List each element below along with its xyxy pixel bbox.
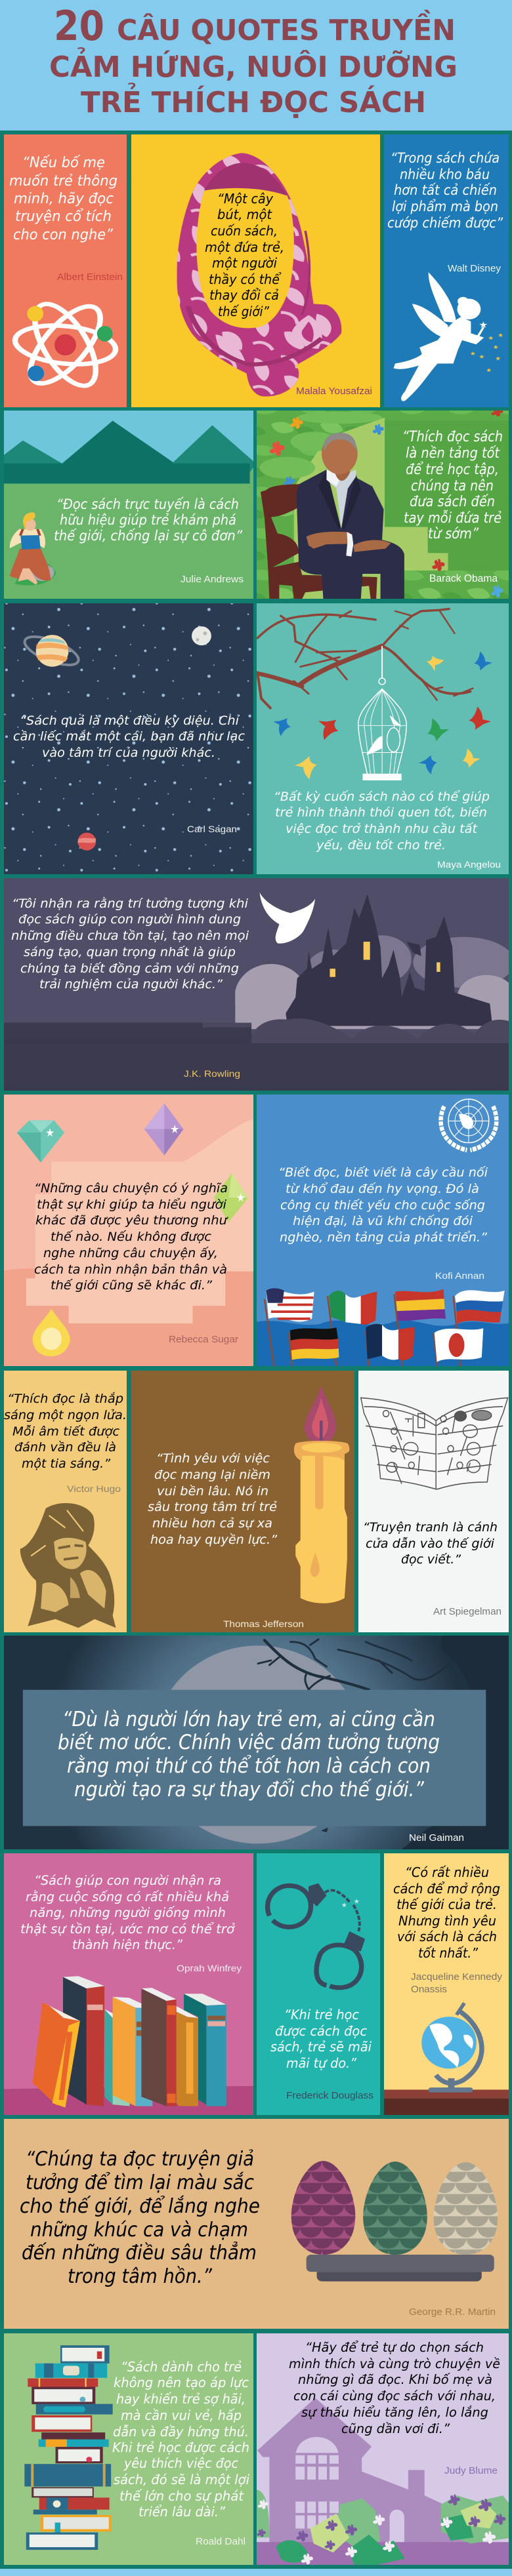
quote: “Truyện tranh là cánh bbox=[363, 1520, 498, 1535]
footer band bbox=[0, 2569, 512, 2576]
quote: người tạo ra sự thay đổi cho thế giới.” bbox=[74, 1778, 425, 1801]
quote: chúng ta biết đồng cảm với những bbox=[20, 961, 239, 976]
author: Julie Andrews bbox=[181, 574, 244, 585]
quote bbox=[363, 1520, 498, 1567]
author: Onassis bbox=[411, 1984, 447, 1995]
author: Victor Hugo bbox=[67, 1483, 121, 1494]
quote: đánh vần đều là bbox=[14, 1440, 116, 1455]
quote: mà cần vui vẻ, hấp bbox=[121, 2407, 242, 2423]
quote: nghèo, nền tảng của phát triển.” bbox=[280, 1230, 487, 1245]
author: Roald Dahl bbox=[196, 2537, 245, 2547]
panel: Barack Obama bbox=[257, 411, 509, 599]
quote: đọc mang lại niềm bbox=[154, 1468, 270, 1482]
quote: rằng cuộc sống có rất nhiều khả bbox=[26, 1889, 229, 1904]
quote: cho con nghe” bbox=[13, 227, 114, 243]
quote: năng, những người giống mình bbox=[30, 1905, 226, 1920]
quote: “Tôi nhận ra rằng trí tưởng tượng khi bbox=[12, 896, 248, 911]
quote: “Thích đọc sách bbox=[402, 429, 503, 445]
author: Carl Sagan bbox=[187, 824, 237, 834]
quote: không nên tạo áp lực bbox=[114, 2375, 249, 2390]
quote: rằng mọi thứ có thể tốt hơn là cách con bbox=[67, 1754, 431, 1778]
author: Jacqueline Kennedy bbox=[411, 1972, 503, 1982]
quote: thế giới cũng sẽ khác đi.” bbox=[51, 1278, 212, 1293]
quote: tốt nhất.” bbox=[418, 1945, 479, 1961]
quote: để trẻ học tập, bbox=[406, 462, 499, 478]
quote: “Một cây bbox=[217, 191, 274, 207]
author: Walt Disney bbox=[448, 263, 501, 274]
quote: với sách là cách bbox=[397, 1929, 497, 1944]
quote: bút, một bbox=[217, 207, 272, 222]
illustration: tree branch bbox=[257, 609, 473, 708]
panel: J.K. Rowling bbox=[4, 878, 509, 1091]
quote: nhiều kho báu bbox=[400, 167, 490, 182]
quote: mãi tự do.” bbox=[286, 2055, 357, 2071]
quote: công cụ thiết yếu cho cuộc sống bbox=[280, 1198, 485, 1213]
author: Art Spiegelman bbox=[433, 1607, 501, 1617]
quote: “Sách giúp con người nhận ra bbox=[34, 1873, 221, 1888]
quote: Khi trẻ học được cách bbox=[112, 2440, 249, 2455]
author: J.K. Rowling bbox=[184, 1068, 240, 1079]
quote: thế giới, chống lại sự cô đơn” bbox=[54, 528, 242, 544]
quote: cho thế giới, để lắng nghe bbox=[20, 2194, 260, 2218]
author: Judy Blume bbox=[444, 2466, 498, 2476]
illustration: comic book bbox=[361, 1398, 508, 1489]
quote: thầy có thể bbox=[209, 272, 282, 287]
panel: Thomas Jefferson bbox=[131, 1371, 354, 1632]
quote bbox=[9, 155, 117, 243]
quote bbox=[387, 150, 503, 231]
quote: sự thấu hiểu tăng lên, lo lắng bbox=[301, 2405, 488, 2420]
illustration: row of books bbox=[0, 1976, 255, 2122]
illustration: background and gems bbox=[0, 1103, 255, 1370]
quote: nghe những câu chuyện ấy, bbox=[43, 1246, 218, 1260]
author: George R.R. Martin bbox=[409, 2306, 496, 2318]
illustration: bird cage bbox=[358, 646, 406, 780]
quote bbox=[274, 790, 490, 853]
quote: cửa dẫn vào thế giới bbox=[366, 1537, 494, 1551]
quote: thế giới” bbox=[218, 304, 269, 319]
icons: birds bbox=[271, 650, 493, 782]
quote: từ khổ đau đến hy vọng. Đó là bbox=[286, 1182, 479, 1196]
panel: Oprah Winfrey bbox=[4, 1853, 253, 2115]
quote: tưởng để tìm lại màu sắc bbox=[26, 2171, 254, 2194]
quote: trẻ hình thành thói quen tốt, biến bbox=[275, 805, 487, 820]
header banner bbox=[0, 0, 512, 131]
illustration: garden background bbox=[257, 407, 512, 602]
quote bbox=[112, 2359, 249, 2520]
panel: Victor Hugo bbox=[4, 1371, 127, 1632]
panel: Carl Sagan bbox=[4, 603, 253, 874]
text backdrop bbox=[23, 1690, 486, 1826]
quote: Mỗi âm tiết được bbox=[12, 1424, 120, 1439]
quote: muốn trẻ thông bbox=[9, 173, 117, 190]
quote: trải nghiệm của người khác.” bbox=[39, 977, 223, 992]
quote: vui bền lâu. Nó in bbox=[157, 1484, 268, 1499]
quote bbox=[13, 714, 245, 760]
panel: Neil Gaiman bbox=[4, 1636, 509, 1849]
quote bbox=[289, 2340, 500, 2436]
quote: yếu, đều tốt cho trẻ. bbox=[316, 838, 446, 853]
quote: đọc viết.” bbox=[401, 1552, 461, 1567]
quote: hữu hiệu giúp trẻ khám phá bbox=[60, 512, 236, 528]
panel: Art Spiegelman bbox=[358, 1371, 509, 1632]
quote: “Sách quả là một điều kỳ diệu. Chỉ bbox=[20, 714, 240, 728]
quote: “Bất kỳ cuốn sách nào có thể giúp bbox=[274, 790, 490, 804]
quote: dẫn và đầy hứng thú. bbox=[113, 2424, 249, 2440]
illustration: seated man bbox=[261, 433, 404, 599]
icon: fairy silhouette bbox=[393, 272, 503, 401]
icon: atom bbox=[12, 298, 119, 392]
quote: những khúc ca và chạm bbox=[30, 2219, 248, 2242]
quote: cách ta nhìn nhận bản thân và bbox=[34, 1262, 227, 1277]
quote: thế giới của trẻ. bbox=[396, 1897, 497, 1912]
quote bbox=[148, 1451, 278, 1547]
quote: Nhưng tình yêu bbox=[398, 1913, 496, 1929]
quote: sách, trẻ sẽ mãi bbox=[270, 2039, 372, 2055]
icon: headscarf bbox=[177, 153, 341, 397]
quote: sáng một ngọn lửa. bbox=[4, 1408, 127, 1422]
quote: “Có rất nhiều bbox=[405, 1864, 489, 1880]
quote: một đứa trẻ, bbox=[205, 239, 284, 255]
quote: hay khiến trẻ sợ hãi, bbox=[116, 2391, 245, 2407]
quote bbox=[393, 1864, 500, 1961]
quote: mình thích và cùng trò chuyện về bbox=[289, 2356, 500, 2371]
quote: cuốn sách, bbox=[211, 223, 278, 239]
illustration: house and flowers bbox=[255, 2398, 512, 2567]
quote: những điều chưa tồn tại, tạo nên mọi bbox=[11, 929, 249, 943]
icon: girl reading bbox=[10, 512, 56, 586]
quote bbox=[20, 2148, 260, 2288]
author: Oprah Winfrey bbox=[177, 1963, 242, 1973]
quote: chúng ta nên bbox=[411, 478, 494, 494]
quote: hiện đại, là vũ khí chống đói bbox=[293, 1214, 473, 1228]
quote: thế nào. Nếu không được bbox=[51, 1230, 212, 1244]
illustration: candle bbox=[294, 1386, 349, 1603]
panel: Judy Blume bbox=[257, 2333, 509, 2565]
quote: “Thích đọc là thắp bbox=[7, 1391, 123, 1406]
author: Thomas Jefferson bbox=[223, 1619, 304, 1629]
title: CẢM HỨNG, NUÔI DƯỠNG bbox=[49, 47, 458, 84]
quote: khác đã được yêu thương như bbox=[35, 1213, 228, 1228]
quote bbox=[58, 1708, 440, 1801]
illustration: globe on desk bbox=[382, 2003, 512, 2123]
quote: “Đọc sách trực tuyến là cách bbox=[56, 496, 239, 512]
quote: trong tâm hồn.” bbox=[68, 2265, 213, 2288]
quote: “Hãy để trẻ tự do chọn sách bbox=[305, 2340, 484, 2355]
quote: hơn tất cả chiến bbox=[394, 182, 497, 198]
quote: truyện cổ tích bbox=[15, 209, 112, 225]
quote: triển lâu dài.” bbox=[139, 2504, 226, 2520]
author: Albert Einstein bbox=[57, 272, 123, 283]
quote: là nền tảng tốt bbox=[406, 445, 500, 462]
panel: Malala Yousafzai bbox=[131, 134, 380, 407]
icon: broken handcuffs bbox=[268, 1883, 365, 1988]
quote: sáng tạo, quan trọng nhất là giúp bbox=[24, 945, 236, 959]
quote: “Nếu bố mẹ bbox=[22, 155, 105, 171]
title: TRẺ THÍCH ĐỌC SÁCH bbox=[81, 82, 426, 119]
illustration: mountains bbox=[0, 409, 258, 483]
illustration: flags bbox=[255, 1288, 512, 1370]
author bbox=[411, 1972, 503, 1995]
quote bbox=[278, 1165, 488, 1245]
quote: “Chúng ta đọc truyện giả bbox=[26, 2148, 254, 2171]
quote: một tia sáng.” bbox=[22, 1457, 110, 1471]
quote: “Sách dành cho trẻ bbox=[121, 2359, 242, 2375]
quote: nhiều hơn cả sự xa bbox=[152, 1516, 272, 1531]
quote: “Tình yêu với việc bbox=[156, 1451, 270, 1466]
panel: Kofi Annan bbox=[257, 1095, 509, 1366]
panel: George R.R. Martin bbox=[4, 2119, 509, 2329]
panel: Albert Einstein bbox=[4, 134, 127, 407]
quote bbox=[34, 1181, 228, 1293]
quote bbox=[20, 1873, 235, 1952]
title bbox=[49, 2, 458, 119]
illustration: dragon eggs bbox=[291, 2161, 498, 2282]
author: Rebecca Sugar bbox=[169, 1335, 238, 1345]
quote: từ sớm” bbox=[428, 526, 479, 542]
panel: Julie Andrews bbox=[4, 411, 253, 599]
illustration: moon and bare tree bbox=[0, 1626, 512, 1855]
quote: cũng dần vơi đi.” bbox=[341, 2421, 450, 2436]
panel: Maya Angelou bbox=[257, 603, 509, 874]
quote: “Trong sách chứa bbox=[391, 150, 500, 166]
author: Kofi Annan bbox=[435, 1270, 484, 1281]
quote: “Dù là người lớn hay trẻ em, ai cũng cần bbox=[62, 1708, 435, 1731]
quote: thật sự khi giúp ta hiểu người bbox=[37, 1197, 226, 1212]
quote: yêu thích việc đọc bbox=[123, 2455, 238, 2471]
quote bbox=[11, 896, 249, 992]
quote: minh, hãy đọc bbox=[14, 191, 114, 207]
quote bbox=[402, 429, 503, 542]
icon: white owl bbox=[260, 893, 315, 944]
quote bbox=[270, 2007, 372, 2071]
quote: đến những điều sâu thẳm bbox=[22, 2240, 257, 2264]
quote: “Khi trẻ học bbox=[284, 2007, 359, 2023]
quote: sâu trong tâm trí trẻ bbox=[148, 1500, 278, 1514]
quote: đưa sách đến bbox=[410, 494, 495, 510]
quote bbox=[4, 1391, 127, 1471]
quote: lợi phẩm mà bọn bbox=[392, 199, 498, 214]
quote: hoa hay quyền lực.” bbox=[150, 1533, 277, 1547]
panel: Roald Dahl bbox=[4, 2333, 253, 2565]
illustration: stack of books bbox=[24, 2345, 113, 2550]
illustration: starfield and planets bbox=[0, 597, 258, 877]
quote: “Biết đọc, biết viết là cây cầu nối bbox=[278, 1165, 488, 1180]
quote: đọc sách giúp con người hình dung bbox=[18, 912, 241, 927]
icon: UN emblem bbox=[441, 1099, 496, 1150]
quote: vào tâm trí của người khác. bbox=[42, 746, 215, 760]
text backdrop bbox=[385, 421, 512, 571]
quote: cướp chiếm được” bbox=[387, 215, 503, 231]
author: Malala Yousafzai bbox=[296, 386, 372, 397]
quote: con cái cùng đọc sách với nhau, bbox=[293, 2388, 496, 2404]
quote: thế lớn cho sự phát bbox=[119, 2488, 244, 2504]
quote: thật sự tồn tại, ước mơ có thể trở bbox=[20, 1922, 235, 1937]
author: Frederick Douglass bbox=[286, 2091, 373, 2101]
panel: Rebecca Sugar bbox=[4, 1095, 253, 1366]
quote: cần liếc mắt một cái, bạn đã như lạc bbox=[13, 729, 245, 744]
panel: Walt Disney bbox=[384, 134, 509, 407]
author: Barack Obama bbox=[429, 573, 498, 584]
quote: tay mỗi đứa trẻ bbox=[404, 510, 501, 527]
panel: Jacqueline Kennedy Onassis bbox=[384, 1853, 509, 2115]
quote: được cách đọc bbox=[275, 2023, 367, 2039]
quote bbox=[54, 496, 242, 544]
quote: thay đổi cả bbox=[209, 287, 279, 303]
illustration: Cosette bbox=[20, 1503, 116, 1628]
quote: cách để mở rộng bbox=[393, 1881, 500, 1897]
quote: biết mơ ước. Chính việc dám tưởng tượng bbox=[58, 1731, 440, 1754]
illustration: castle at night bbox=[0, 878, 512, 1095]
quote: những gì đã đọc. Khi bố mẹ và bbox=[298, 2372, 492, 2387]
quote: sách, đó sẽ là một lợi bbox=[114, 2472, 249, 2487]
title: CÂU QUOTES TRUYỀN bbox=[117, 9, 456, 47]
quote: một người bbox=[212, 255, 278, 271]
title: 20 bbox=[54, 2, 104, 50]
quote: “Những câu chuyện có ý nghĩa bbox=[34, 1181, 228, 1196]
author: Maya Angelou bbox=[437, 859, 501, 870]
author: Neil Gaiman bbox=[409, 1833, 464, 1843]
panel: Frederick Douglass bbox=[257, 1853, 380, 2115]
quote bbox=[205, 191, 284, 319]
quote: việc đọc trở thành nhu cầu tất bbox=[286, 822, 478, 836]
quote: thành hiện thực.” bbox=[72, 1937, 183, 1952]
